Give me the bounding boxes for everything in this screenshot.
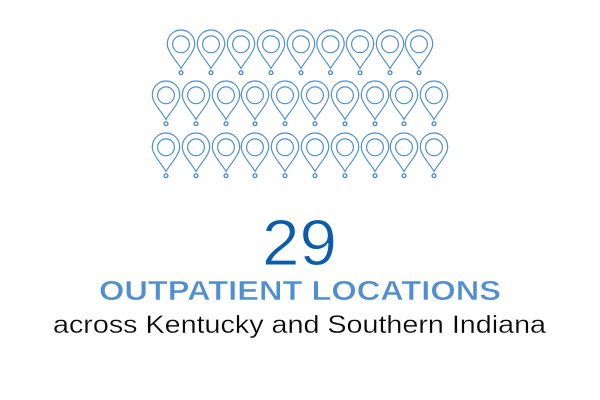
pin row 1 <box>167 30 433 75</box>
pin row 3 <box>152 133 448 178</box>
pin row 2 <box>152 81 448 126</box>
subheading: across Kentucky and Southern Indiana <box>53 311 546 339</box>
big number: 29 <box>262 206 337 279</box>
pin icons grid <box>152 30 448 178</box>
heading: OUTPATIENT LOCATIONS <box>99 275 501 306</box>
